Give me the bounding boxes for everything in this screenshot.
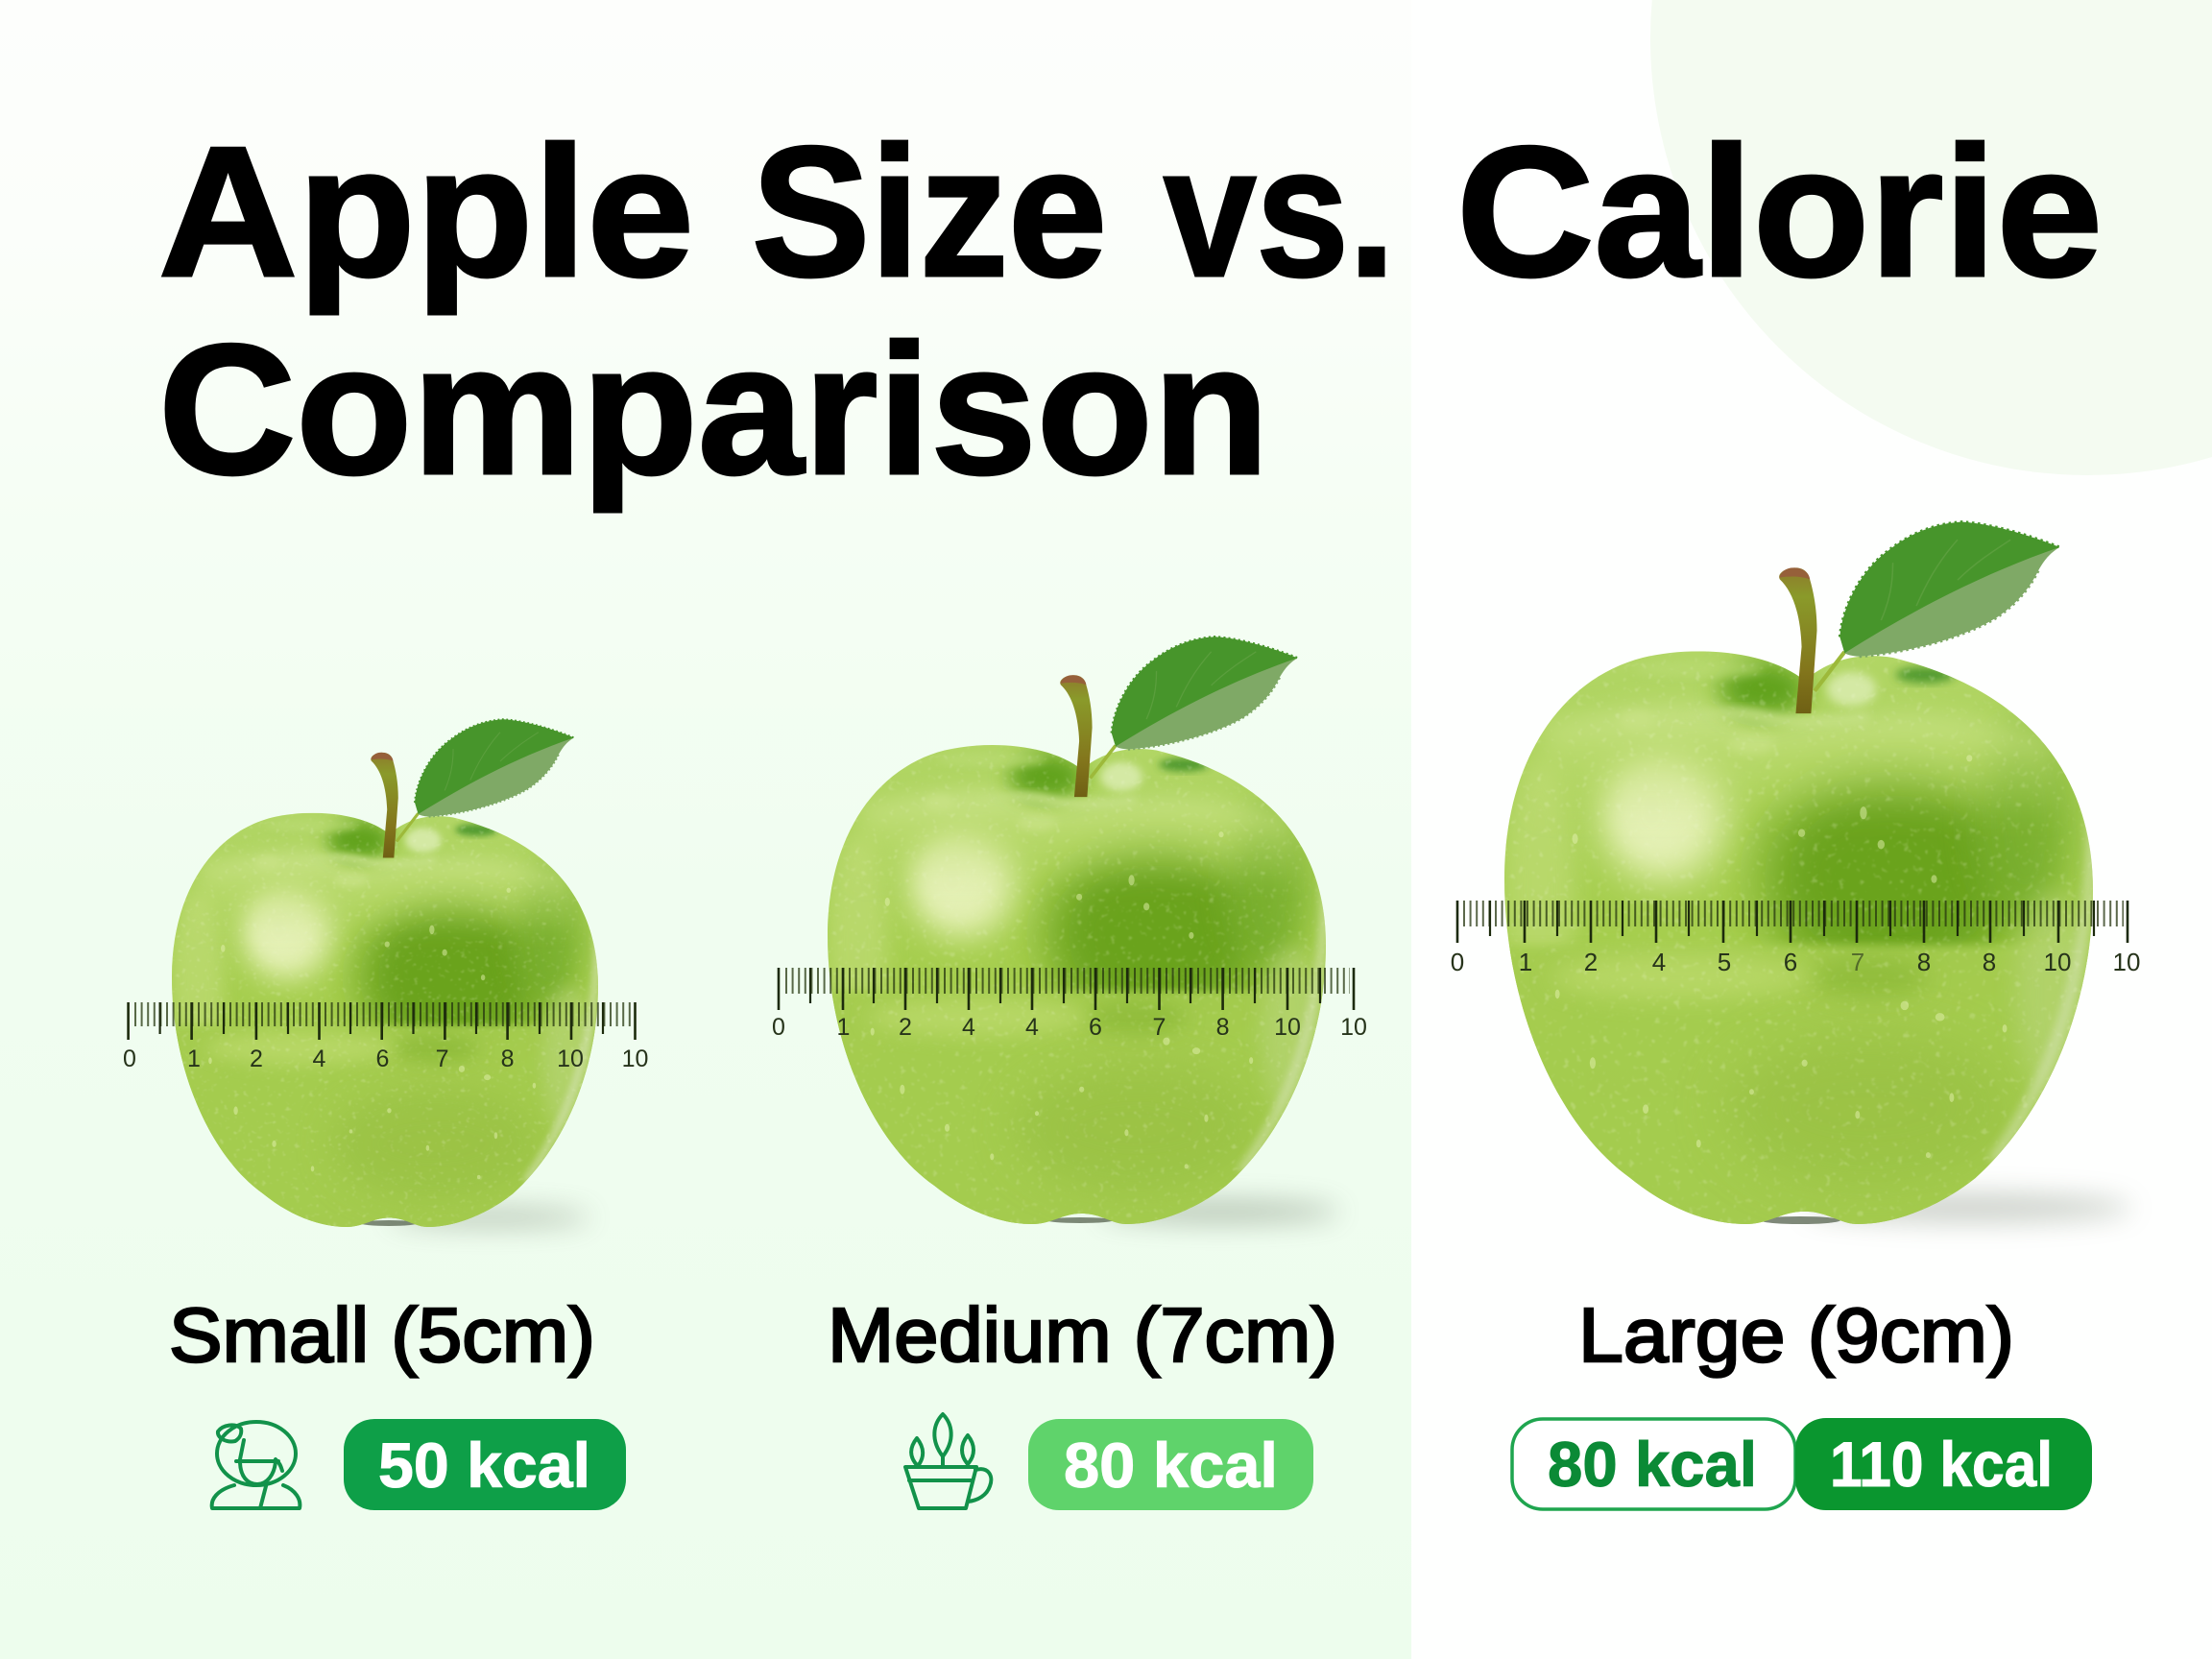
ruler large: 2 <box>1584 948 1598 976</box>
title <box>158 108 2103 513</box>
ruler large: 6 <box>1784 948 1797 976</box>
panel: large apple <box>1451 522 2140 1510</box>
ruler large: 7 <box>1851 948 1864 976</box>
icon: apple face with cup <box>212 1422 300 1508</box>
title: Apple <box>158 108 694 315</box>
ruler large: 5 <box>1718 948 1731 976</box>
ruler small: 1 <box>187 1046 201 1072</box>
apple shadow large <box>1760 1194 2131 1224</box>
calorie pill small: 50 kcal <box>378 1430 590 1501</box>
calorie pill medium <box>1028 1419 1313 1510</box>
ruler small <box>123 1002 648 1072</box>
ruler medium: 7 <box>1153 1014 1166 1041</box>
title: Size <box>752 108 1107 315</box>
apple illustration large <box>1469 522 2128 1244</box>
ruler medium: 0 <box>772 1014 785 1041</box>
ruler medium: 6 <box>1089 1014 1102 1041</box>
ruler large: 0 <box>1451 948 1464 976</box>
title: Comparison <box>158 305 1269 513</box>
ruler small: 10 <box>557 1046 584 1072</box>
calorie pill 80 kcal outlined <box>1512 1419 1795 1509</box>
label medium: Medium (7cm) <box>828 1292 1337 1378</box>
ruler medium: 8 <box>1216 1014 1230 1041</box>
ruler medium: 10 <box>1340 1014 1367 1041</box>
panel: small apple <box>123 719 648 1510</box>
ruler large: 4 <box>1652 948 1666 976</box>
label large: Large (9cm) <box>1578 1292 2014 1378</box>
ruler small: 10 <box>622 1046 648 1072</box>
ruler large: 1 <box>1519 948 1532 976</box>
calorie pill 110 kcal filled <box>1795 1418 2092 1510</box>
apple illustration small <box>146 719 624 1241</box>
ruler medium: 4 <box>962 1014 975 1041</box>
pale green left background panel <box>0 0 1411 1659</box>
ruler large <box>1451 901 2140 976</box>
ruler medium <box>772 968 1367 1041</box>
title: vs. <box>1164 108 1395 315</box>
icon: cup with leaves <box>905 1414 991 1508</box>
decorative circle top right <box>1650 0 2212 475</box>
label small: Small (5cm) <box>169 1292 595 1378</box>
calorie pill 110 kcal filled: 110 kcal <box>1830 1429 2053 1500</box>
apple shadow medium <box>1046 1201 1339 1223</box>
calorie pill small <box>344 1419 626 1510</box>
apple illustration medium <box>798 637 1356 1241</box>
calorie pill 80 kcal outlined: 80 kcal <box>1548 1429 1757 1500</box>
ruler small: 0 <box>123 1046 136 1072</box>
ruler small: 6 <box>376 1046 389 1072</box>
ruler small: 7 <box>436 1046 449 1072</box>
ruler large: 10 <box>2044 948 2071 976</box>
panel: medium apple <box>772 637 1367 1510</box>
calorie pill medium: 80 kcal <box>1064 1430 1278 1501</box>
ruler medium: 1 <box>837 1014 850 1041</box>
ruler medium: 2 <box>899 1014 912 1041</box>
ruler small: 4 <box>313 1046 326 1072</box>
apple shadow small <box>360 1209 590 1226</box>
ruler small: 8 <box>501 1046 515 1072</box>
ruler medium: 10 <box>1274 1014 1301 1041</box>
ruler large: 8 <box>1917 948 1931 976</box>
ruler large: 8 <box>1983 948 1996 976</box>
ruler small: 2 <box>250 1046 263 1072</box>
ruler medium: 4 <box>1025 1014 1039 1041</box>
ruler large: 10 <box>2113 948 2140 976</box>
title: Calorie <box>1456 108 2103 315</box>
